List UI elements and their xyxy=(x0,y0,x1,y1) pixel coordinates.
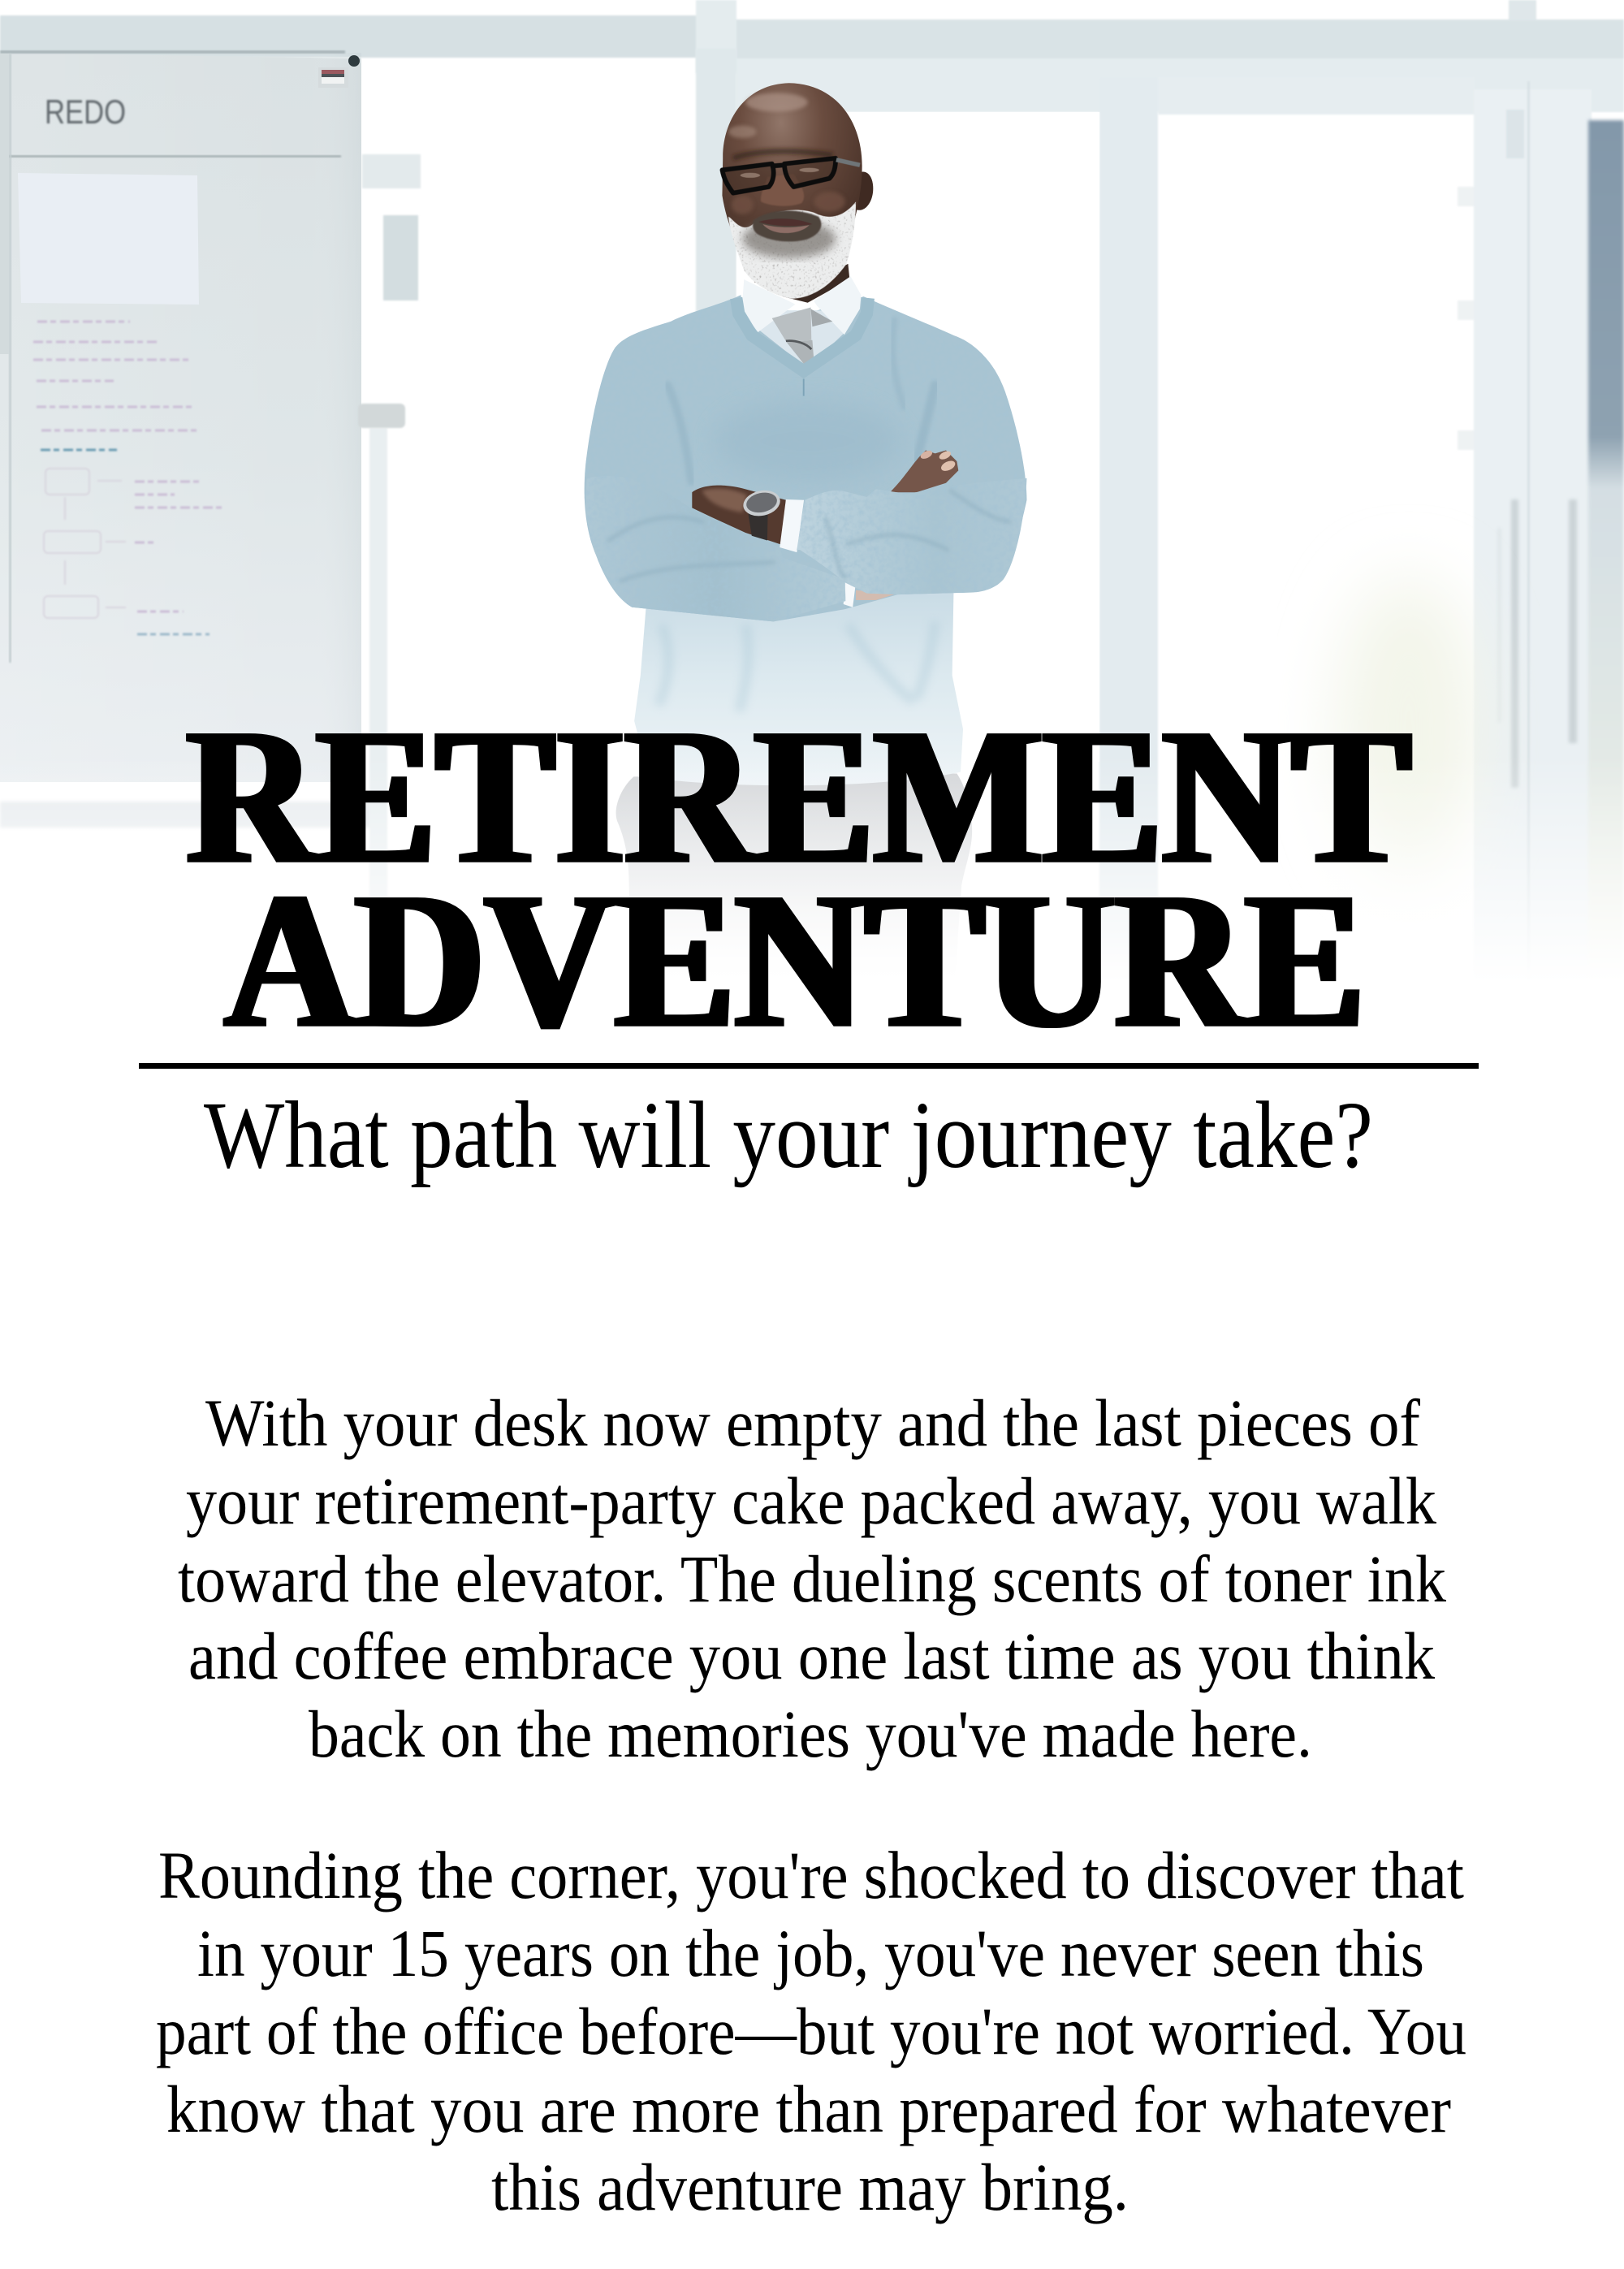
building behind glass xyxy=(362,154,421,300)
skin forearm with watch xyxy=(692,486,786,545)
head highlights xyxy=(728,93,845,214)
glasses xyxy=(722,158,860,193)
whiteboard xyxy=(0,50,361,782)
right forearm sleeve xyxy=(797,478,1026,594)
window frame top bars xyxy=(0,0,1624,112)
beard grey transition xyxy=(742,220,836,258)
head xyxy=(722,83,862,283)
bottom white fade over photo xyxy=(0,755,1624,983)
neck xyxy=(783,264,849,303)
window post right of the man xyxy=(1099,77,1158,995)
marker clip xyxy=(318,55,360,88)
white area below photo xyxy=(0,982,1624,1079)
garden greenery blur xyxy=(1336,577,1482,885)
intro paragraph 1: your retirement-party cake packed away, you walk xyxy=(186,1463,1436,1538)
pinned paper xyxy=(18,173,199,305)
nose xyxy=(761,174,804,206)
title line RETIREMENT: RETIREMENT xyxy=(187,688,1411,904)
upper glass between the posts xyxy=(736,112,1099,762)
dark moustache and goatee xyxy=(753,210,821,241)
white shirt cuff xyxy=(780,499,804,552)
eyes xyxy=(741,168,819,178)
intro paragraph 1 xyxy=(178,1385,1446,1771)
main title xyxy=(187,688,1411,1068)
intro paragraph 1: With your desk now empty and the last pieces of xyxy=(205,1385,1420,1460)
sweater upper body xyxy=(585,295,1026,621)
office photo background xyxy=(0,0,1624,999)
intro paragraph 1: back on the memories you've made here. xyxy=(309,1696,1312,1771)
intro paragraph 2: part of the office before—but you're not worried. You xyxy=(156,1994,1466,2068)
beard xyxy=(728,201,856,299)
shirt under V-neck xyxy=(758,310,845,365)
left forearm sleeve xyxy=(586,476,845,621)
intro paragraph 2: Rounding the corner, you're shocked to discover that xyxy=(158,1838,1464,1912)
vertical post behind the man xyxy=(696,49,736,325)
shirt collar xyxy=(742,276,862,335)
ear xyxy=(856,172,873,210)
sleeve creases xyxy=(609,491,1009,581)
intro paragraph 2: know that you are more than prepared for whatever xyxy=(166,2072,1451,2146)
flowchart boxes xyxy=(44,469,126,618)
V-neck ribbing xyxy=(736,298,868,396)
intro paragraph 1: and coffee embrace you one last time as you think xyxy=(188,1619,1435,1693)
intro paragraph 2: this adventure may bring. xyxy=(491,2150,1129,2224)
intro paragraph 1: toward the elevator. The dueling scents of toner ink xyxy=(178,1541,1446,1616)
intro paragraph 2 xyxy=(156,1838,1466,2224)
door glass dark panel xyxy=(1588,120,1624,997)
watch face xyxy=(741,487,783,519)
intro paragraph 2: in your 15 years on the job, you've never seen this xyxy=(197,1916,1424,1990)
handwriting scribbles xyxy=(33,322,226,634)
divider rule xyxy=(139,1063,1479,1069)
subtitle: What path will your journey take? xyxy=(204,1082,1373,1188)
small lower cuff and fingers xyxy=(844,577,898,607)
band below whiteboard xyxy=(0,802,383,828)
lower sweater xyxy=(634,587,963,785)
door frame right xyxy=(1158,77,1592,999)
mouth xyxy=(758,218,812,233)
title line ADVENTURE: ADVENTURE xyxy=(225,852,1365,1068)
trousers xyxy=(616,774,972,997)
handwritten word: REDO xyxy=(45,93,126,131)
watch strap xyxy=(748,508,768,541)
sweater lower folds xyxy=(659,621,935,711)
hand on right arm xyxy=(890,449,958,492)
man with crossed arms xyxy=(585,83,1026,997)
necktie xyxy=(772,308,832,365)
door handles xyxy=(1497,499,1577,788)
sweater shading xyxy=(667,320,935,482)
stand pole xyxy=(358,404,405,948)
